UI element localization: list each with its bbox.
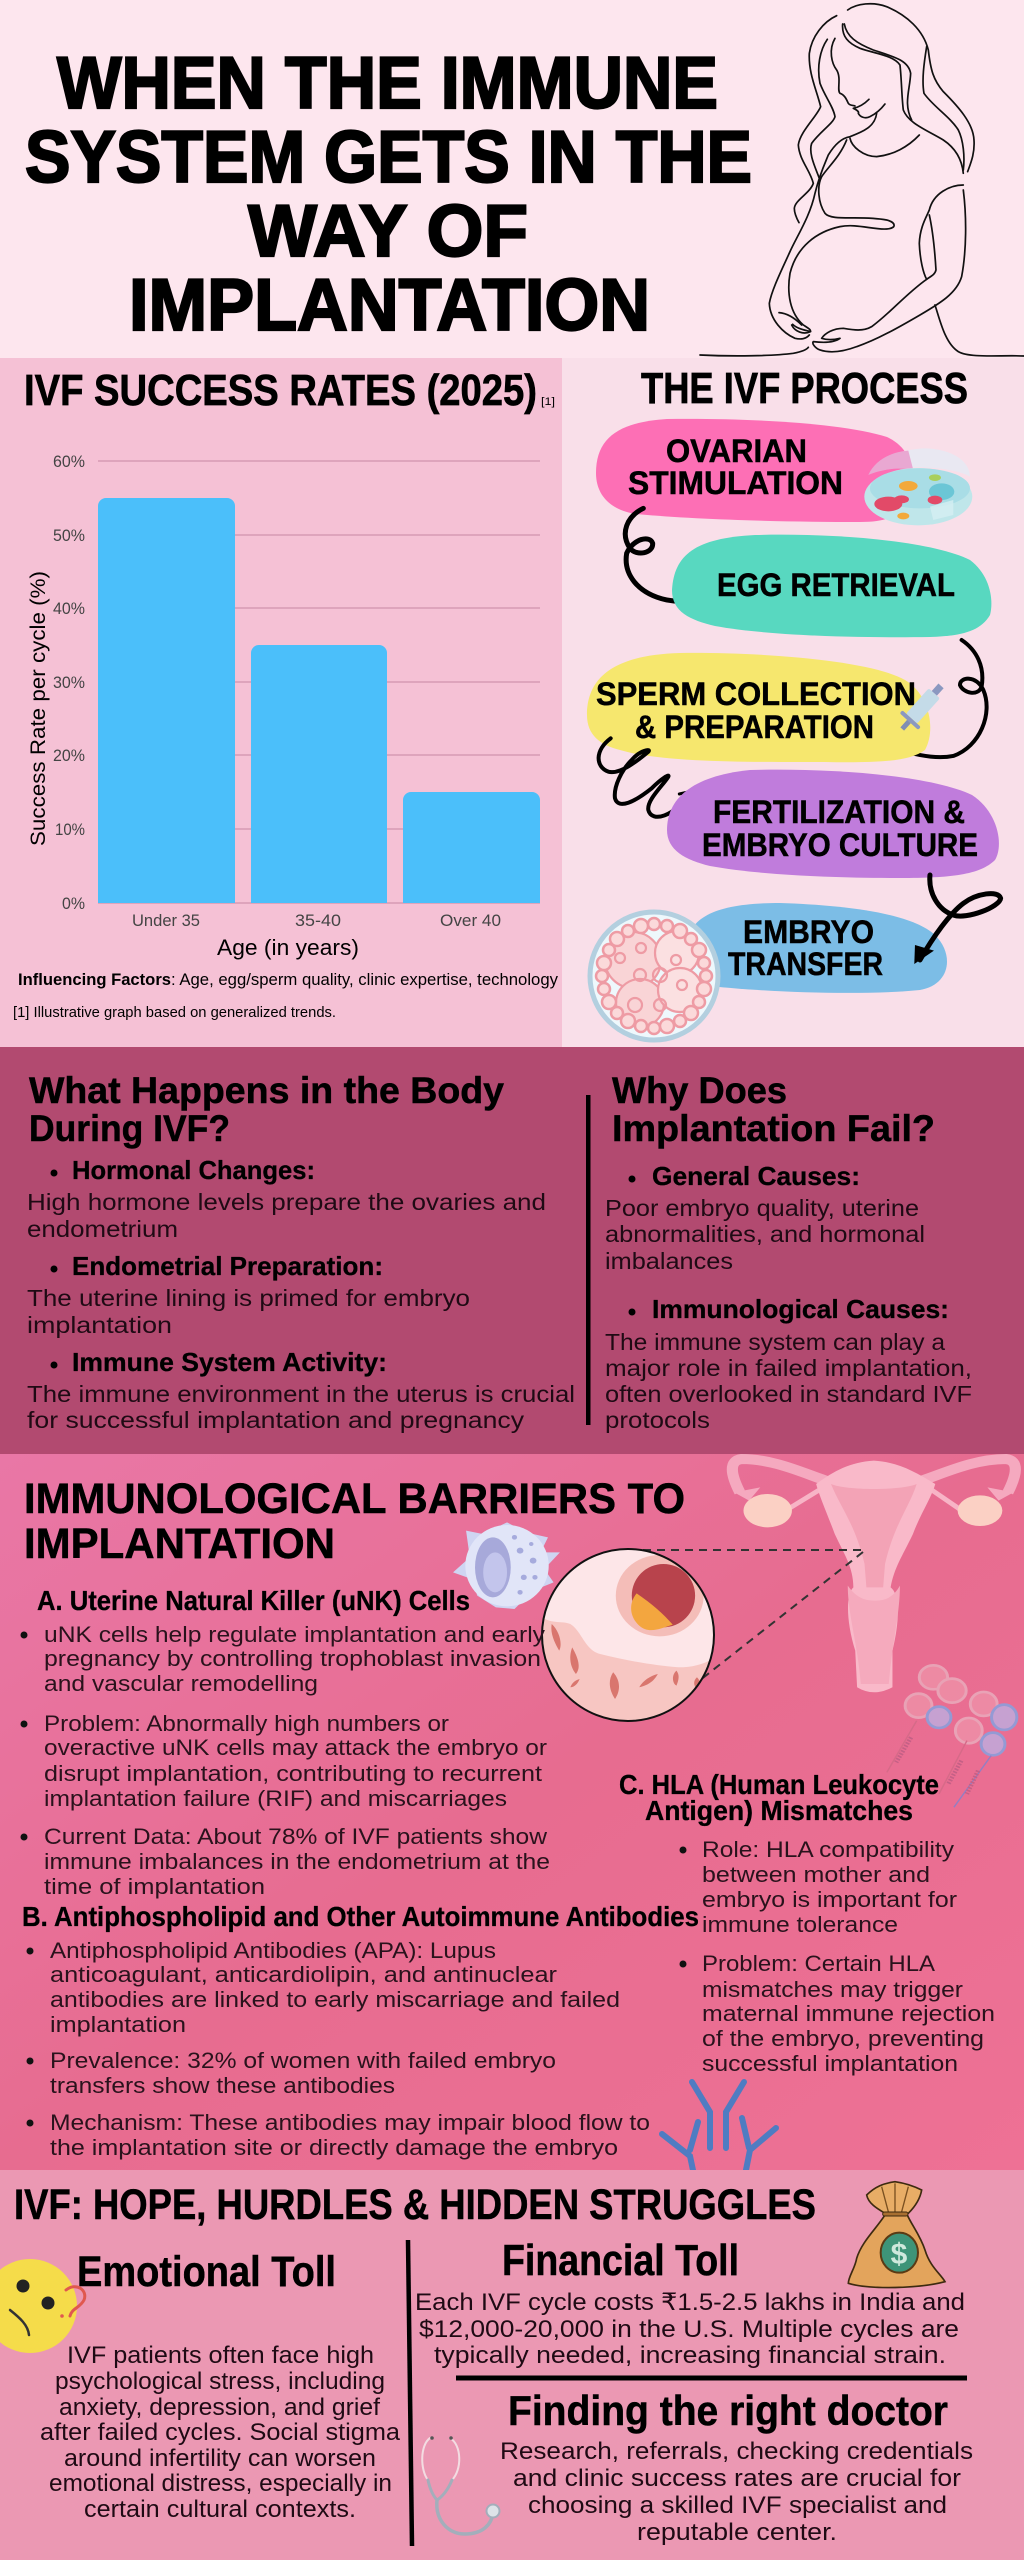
arrow: ovarian to egg retrieval	[625, 508, 711, 615]
heading: IVF success rates: [1]	[541, 396, 555, 408]
bar chart: 30%	[53, 673, 85, 692]
panel: IVF success rates chart	[0, 358, 562, 1047]
text block: antiphospholipid antibodies: B. Antiphospholipid and Other Autoimmune Antibodies	[22, 1901, 699, 1932]
heading: immunological barriers: IMPLANTATION	[24, 1520, 335, 1568]
arrow: sperm collection to fertilization	[599, 738, 692, 817]
text block: emotional toll: around infertility can worsen	[64, 2445, 376, 2472]
text block: finding the right doctor: Finding the right doctor	[508, 2387, 948, 2434]
step: embryo transfer: TRANSFER	[728, 946, 883, 982]
heading: hope hurdles: IVF: HOPE, HURDLES & HIDDEN STRUGGLES	[14, 2181, 816, 2229]
text block: emotional toll: emotional distress, especially in	[49, 2470, 392, 2497]
text block: HLA mismatches: immune tolerance	[702, 1912, 898, 1937]
step: fertilization and embryo culture	[667, 770, 999, 878]
text block: antiphospholipid antibodies: the implantation site or directly damage the embryo	[50, 2135, 618, 2160]
icon: embryo in dish	[590, 912, 718, 1040]
icon: uNK cell	[453, 1522, 560, 1609]
step: sperm collection and preparation: & PREPARATION	[635, 709, 874, 745]
step: fertilization and embryo culture: FERTILIZATION &	[713, 794, 965, 830]
text block: uNK cells: Current Data: About 78% of IVF patients show	[44, 1824, 547, 1849]
text block: HLA mismatches: maternal immune rejection	[702, 2001, 995, 2026]
text block: uNK cells	[20, 1585, 550, 1899]
icon: HLA receptors	[887, 1665, 1017, 1807]
title: SYSTEM GETS IN THE	[25, 117, 752, 198]
footnote: [1] Illustrative graph based on generalized trends.	[13, 1005, 336, 1021]
icon: pregnant woman line drawing	[700, 4, 1024, 356]
title	[25, 43, 752, 346]
text block: HLA mismatches: successful implantation	[702, 2051, 958, 2076]
text block: what happens in the body: High hormone levels prepare the ovaries and	[27, 1189, 546, 1215]
text block: HLA mismatches: of the embryo, preventing	[702, 2026, 984, 2051]
panel: what happens and why implantation fails	[0, 1047, 1024, 1454]
step: embryo transfer: EMBRYO	[743, 914, 874, 950]
panel: header	[0, 0, 1024, 358]
text block: emotional toll	[40, 2248, 401, 2523]
text block: emotional toll: Emotional Toll	[77, 2248, 336, 2296]
text block: antiphospholipid antibodies: antibodies are linked to early miscarriage and failed	[50, 1987, 620, 2012]
bar chart	[27, 452, 540, 960]
text block: antiphospholipid antibodies	[22, 1901, 699, 2160]
text block: uNK cells: A. Uterine Natural Killer (uNK) Cells	[37, 1585, 470, 1616]
text block: HLA mismatches: mismatches may trigger	[702, 1977, 963, 2002]
text block: antiphospholipid antibodies: transfers show these antibodies	[50, 2073, 395, 2098]
bar chart: Over 40	[440, 911, 501, 930]
panel: hope, hurdles and hidden struggles	[0, 2170, 1024, 2560]
step: ovarian stimulation: OVARIAN	[666, 433, 807, 469]
bar chart: 20%	[53, 746, 85, 765]
bar chart: 50%	[53, 526, 85, 545]
text block: why does implantation fail: major role in failed implantation,	[605, 1355, 972, 1381]
bar chart: 40%	[53, 599, 85, 618]
step: fertilization and embryo culture: EMBRYO CULTURE	[702, 827, 978, 863]
text block: antiphospholipid antibodies: Mechanism: These antibodies may impair blood flow to	[50, 2110, 650, 2135]
text block: what happens in the body: The uterine lining is primed for embryo	[27, 1285, 470, 1311]
icon: antibodies	[662, 2082, 776, 2175]
text block: finding the right doctor: choosing a skilled IVF specialist and	[528, 2492, 947, 2519]
text block: what happens in the body: endometrium	[27, 1216, 178, 1242]
text block: what happens in the body: Immune System Activity:	[72, 1347, 387, 1377]
text block: financial toll: $12,000-20,000 in the U.S. Multiple cycles are	[419, 2316, 959, 2343]
text block: antiphospholipid antibodies: anticoagulant, anticardiolipin, and antinuclear	[50, 1962, 557, 1987]
text block: what happens in the body: implantation	[27, 1312, 172, 1338]
icon: magnified endometrium	[542, 1549, 863, 1724]
icon: stethoscope	[422, 2436, 500, 2534]
text block: why does implantation fail: often overlooked in standard IVF	[605, 1381, 972, 1407]
text block: why does implantation fail: imbalances	[605, 1248, 733, 1274]
bar chart: Under 35	[132, 911, 200, 930]
text block: uNK cells: pregnancy by controlling trophoblast invasion	[44, 1646, 541, 1671]
arrow: egg retrieval to sperm collection	[882, 640, 987, 757]
text block: uNK cells: implantation failure (RIF) and miscarriages	[44, 1786, 507, 1811]
text block: antiphospholipid antibodies: Prevalence: 32% of women with failed embryo	[50, 2048, 556, 2073]
icon: confused emoji	[0, 2259, 85, 2353]
text block: uNK cells: immune imbalances in the endometrium at the	[44, 1849, 550, 1874]
text block: HLA mismatches: embryo is important for	[702, 1887, 957, 1912]
text block: HLA mismatches: between mother and	[702, 1862, 930, 1887]
text block: finding the right doctor	[500, 2387, 973, 2546]
text block: finding the right doctor: and clinic success rates are crucial for	[513, 2465, 961, 2492]
icon: uterus	[732, 1459, 1015, 1692]
title: WAY OF	[248, 191, 528, 272]
text block: why does implantation fail: Immunological Causes:	[652, 1294, 949, 1324]
heading: IVF success rates: IVF SUCCESS RATES (2025)	[24, 366, 537, 415]
text block: HLA mismatches: Antigen) Mismatches	[645, 1795, 913, 1826]
step: embryo transfer	[686, 903, 947, 993]
text block: uNK cells: uNK cells help regulate implantation and early	[44, 1622, 545, 1647]
text block: why does implantation fail: Why Does	[612, 1070, 787, 1111]
text block: HLA mismatches: C. HLA (Human Leukocyte	[619, 1769, 939, 1800]
step: egg retrieval	[672, 535, 991, 637]
text block: why does implantation fail: protocols	[605, 1407, 710, 1433]
text block: financial toll: Financial Toll	[502, 2236, 739, 2285]
text block: uNK cells: overactive uNK cells may attack the embryo or	[44, 1735, 547, 1760]
text block: what happens in the body: The immune environment in the uterus is crucial	[27, 1381, 575, 1407]
bar chart: 10%	[55, 820, 85, 839]
text block: uNK cells: Problem: Abnormally high numbers or	[44, 1711, 449, 1736]
text block: emotional toll: after failed cycles. Social stigma	[40, 2419, 401, 2446]
bar chart: Age (in years)	[217, 935, 359, 960]
text: influencing factors: Influencing Factors	[18, 971, 171, 989]
heading: immunological barriers	[24, 1475, 685, 1568]
icon: money bag: $	[891, 2238, 908, 2271]
title: IMPLANTATION	[129, 265, 650, 346]
text block: HLA mismatches: Role: HLA compatibility	[702, 1837, 954, 1862]
text block: emotional toll: psychological stress, including	[55, 2368, 385, 2395]
title: WHEN THE IMMUNE	[57, 43, 718, 124]
bar chart: 60%	[53, 452, 85, 471]
text block: why does implantation fail: Poor embryo quality, uterine	[605, 1195, 919, 1221]
text block: what happens in the body: Endometrial Preparation:	[72, 1251, 383, 1281]
text block: why does implantation fail: Implantation Fail?	[612, 1108, 935, 1149]
text block: financial toll	[415, 2236, 965, 2369]
step: ovarian stimulation	[596, 419, 913, 522]
text block: why does implantation fail: abnormalities, and hormonal	[605, 1221, 925, 1247]
icon: petri dish	[864, 448, 972, 525]
step: ovarian stimulation: STIMULATION	[628, 465, 843, 501]
bar chart: 35-40	[295, 911, 341, 930]
text block: uNK cells: disrupt implantation, contributing to recurrent	[44, 1761, 542, 1786]
step: egg retrieval: EGG RETRIEVAL	[717, 567, 955, 603]
step: sperm collection and preparation	[587, 653, 930, 762]
bar chart: 0%	[62, 894, 85, 913]
text block: antiphospholipid antibodies: implantation	[50, 2012, 186, 2037]
panel: immunological barriers	[0, 1454, 1024, 2175]
panel: the IVF process	[562, 358, 1024, 1047]
bar chart: Success Rate per cycle (%)	[27, 571, 50, 846]
text block: finding the right doctor: reputable center.	[637, 2519, 837, 2546]
text block: what happens in the body	[27, 1070, 575, 1433]
text block: emotional toll: certain cultural contexts.	[84, 2496, 356, 2523]
heading: immunological barriers: IMMUNOLOGICAL BARRIERS TO	[24, 1475, 685, 1523]
icon: syringe	[893, 678, 950, 737]
text block: what happens in the body: Hormonal Changes:	[72, 1155, 315, 1185]
text: influencing factors: : Age, egg/sperm quality, clinic expertise, technology	[171, 971, 559, 989]
text block: HLA mismatches	[619, 1769, 995, 2076]
text block: why does implantation fail	[605, 1070, 972, 1433]
text block: what happens in the body: During IVF?	[29, 1108, 230, 1149]
text block: why does implantation fail: General Causes:	[652, 1161, 860, 1191]
text block: antiphospholipid antibodies: Antiphospholipid Antibodies (APA): Lupus	[50, 1938, 496, 1963]
text block: financial toll: typically needed, increasing financial strain.	[434, 2342, 946, 2369]
text block: why does implantation fail: The immune system can play a	[605, 1329, 945, 1355]
icon: money bag	[848, 2182, 945, 2288]
text block: what happens in the body: for successful implantation and pregnancy	[27, 1407, 525, 1433]
text block: HLA mismatches: Problem: Certain HLA	[702, 1951, 935, 1976]
text block: what happens in the body: What Happens in the Body	[29, 1070, 504, 1111]
text block: emotional toll: IVF patients often face high	[67, 2342, 374, 2369]
text block: emotional toll: anxiety, depression, and grief	[59, 2394, 380, 2421]
text block: finding the right doctor: Research, referrals, checking credentials	[500, 2438, 973, 2465]
step: sperm collection and preparation: SPERM COLLECTION	[596, 676, 916, 712]
text block: uNK cells: and vascular remodelling	[44, 1671, 318, 1696]
text block: uNK cells: time of implantation	[44, 1874, 265, 1899]
arrow: fertilization to embryo transfer	[914, 875, 1001, 964]
text block: financial toll: Each IVF cycle costs ₹1.5-2.5 lakhs in India and	[415, 2289, 965, 2316]
